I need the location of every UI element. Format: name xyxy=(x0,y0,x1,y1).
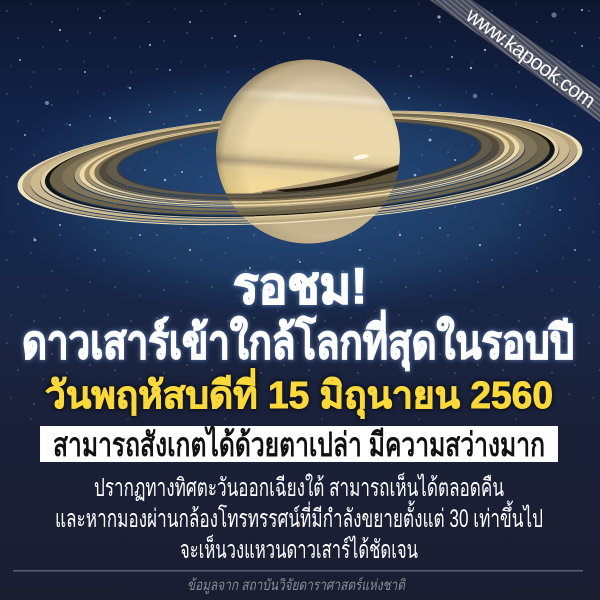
date line in yellow: วันพฤหัสบดีที่ 15 มิถุนายน 2560 xyxy=(45,368,553,419)
banner: www.kapook.com ribbon: www.kapook.com xyxy=(461,3,600,113)
Saturn: planet globe xyxy=(216,60,400,244)
title: รอชม!: รอชม! xyxy=(233,258,367,314)
source credit: ข้อมูลจาก สถาบันวิจัยดาราศาสตร์แห่งชาติ xyxy=(187,576,407,594)
Saturn: front ring bands crossing the planet xyxy=(226,180,396,225)
title: รอชม!: รอชม! xyxy=(233,258,367,314)
Saturn: full ring system behind planet xyxy=(17,96,583,240)
body text block: จะเห็นวงแหวนดาวเสาร์ได้ชัดเจน xyxy=(180,534,418,564)
body text block xyxy=(55,472,543,564)
star field xyxy=(19,9,583,269)
date line in yellow: วันพฤหัสบดีที่ 15 มิถุนายน 2560 xyxy=(45,368,553,419)
